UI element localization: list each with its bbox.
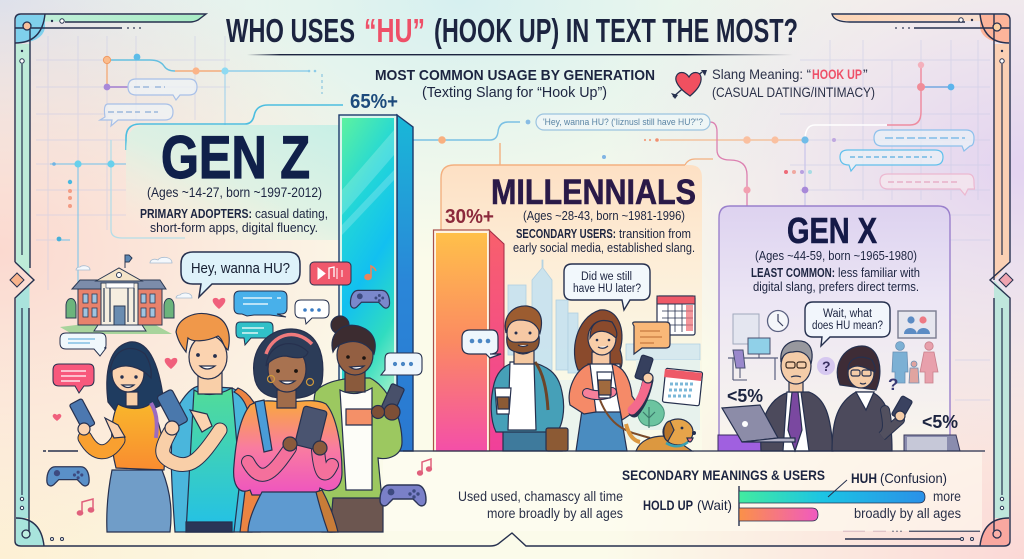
gen x description: less familiar with <box>838 266 920 280</box>
gen z description <box>140 185 328 235</box>
speech bubble: wait what: does HU mean? <box>812 320 883 332</box>
illustration: school building <box>60 255 192 334</box>
icon: music note pink right <box>418 459 431 475</box>
bar: gen z 65 percent <box>339 115 413 451</box>
speech bubble: did we still: have HU later? <box>573 283 641 295</box>
heading: gen z: GEN Z <box>161 124 310 191</box>
icon: question mark bubble: ? <box>822 358 831 374</box>
icon: wall calendar <box>657 296 695 335</box>
millennials description <box>513 209 695 255</box>
chat bubbles: decorative upper left <box>100 79 197 126</box>
gen x description: (Ages ~44-59, born ~1965-1980) <box>755 249 917 263</box>
panel: secondary meanings <box>383 451 985 531</box>
label: hold up: (Wait) <box>697 497 732 513</box>
illustration: girl with headband <box>234 329 342 532</box>
gen z description: short-form apps, digital fluency. <box>150 220 318 235</box>
quote pill <box>536 114 710 130</box>
illustration: boy with orange hair <box>156 314 262 532</box>
millennials description: SECONDARY USERS: <box>516 227 616 241</box>
speech bubble: wait what <box>805 302 890 346</box>
panel: gen z <box>126 124 339 240</box>
label: under 5 percent right: <5% <box>922 412 958 432</box>
illustration: dog <box>600 400 696 451</box>
icon: white chat left <box>60 333 106 356</box>
gen z description: (Ages ~14-27, born ~1997-2012) <box>147 185 322 200</box>
title: (HOOK UP) IN TEXT THE MOST? <box>434 12 798 49</box>
label: huh: (Confusion) <box>880 470 947 486</box>
icon: teal chat <box>236 322 273 345</box>
subtitle: (Texting Slang for “Hook Up”) <box>422 85 607 101</box>
panel: gen x <box>719 206 950 451</box>
illustration: person with bun and green cardigan <box>314 316 405 532</box>
millennials description: early social media, established slang. <box>513 241 695 255</box>
background grid <box>36 36 990 400</box>
gen x description <box>751 249 920 294</box>
icon: family silhouettes <box>892 342 938 383</box>
title <box>226 12 798 49</box>
illustration: man with coffee <box>491 306 568 451</box>
title: WHO USES <box>226 12 355 49</box>
icon: heart with arrow <box>671 70 707 99</box>
subtitle: MOST COMMON USAGE BY GENERATION <box>375 67 655 84</box>
slang meaning: (CASUAL DATING/INTIMACY) <box>712 84 875 100</box>
millennials description: (Ages ~28-43, born ~1981-1996) <box>523 209 685 223</box>
subtitle <box>375 67 655 101</box>
small bar: gen x right <box>904 435 960 451</box>
icon: media player <box>310 262 351 285</box>
left note: more broadly by all ages <box>487 506 623 521</box>
speech bubble: wait what: Wait, what <box>823 308 873 320</box>
label: hold up: HOLD UP <box>643 497 693 513</box>
label: huh: HUH <box>851 470 877 486</box>
heading: gen x: GEN X <box>787 210 877 251</box>
network lines: upper left <box>50 54 954 300</box>
icon: blue chat <box>234 291 287 317</box>
right note: broadly by all ages <box>854 506 961 521</box>
speech bubble: hey wanna hu: Hey, wanna HU? <box>191 261 290 277</box>
icon: hearts <box>53 298 225 421</box>
gen z description: casual dating, <box>255 206 328 221</box>
panel: millennials <box>441 165 702 451</box>
illustration: woman with coffee and phone <box>569 310 653 451</box>
icon: clock <box>768 310 788 332</box>
icon: dots bubble millennials <box>462 330 501 358</box>
illustration: office desk <box>728 314 778 380</box>
icon: laptop <box>722 405 795 442</box>
label: 65%: 65%+ <box>350 91 398 113</box>
gen x description: digital slang, prefers direct terms. <box>753 280 919 294</box>
speech bubble: hey wanna hu <box>181 252 300 297</box>
icon: pink chat left <box>53 364 94 393</box>
icon: dots chat <box>295 300 329 324</box>
icon: game pad purple right <box>380 485 426 506</box>
illustration: girl with long hair <box>69 342 171 532</box>
left note <box>458 489 623 521</box>
illustration: man with laptop <box>761 341 833 451</box>
small bar: gen x left <box>718 435 768 451</box>
illustration: city skyline <box>505 260 700 440</box>
icon: dots bubble gen z <box>381 353 422 375</box>
gen x description: LEAST COMMON: <box>751 266 835 280</box>
heading: secondary meanings: SECONDARY MEANINGS & USERS <box>622 467 825 483</box>
slang meaning: Slang Meaning: “ <box>712 66 811 82</box>
chat bubbles: decorative upper right <box>840 130 975 195</box>
icon: orange chat bubble <box>633 322 670 354</box>
title: “HU” <box>364 12 425 49</box>
icon: music note pink left <box>77 499 94 515</box>
icon: music note orange <box>365 266 376 279</box>
label: huh <box>851 470 947 486</box>
icon: purple question mark: ? <box>888 375 898 394</box>
speech bubble: did we still: Did we still <box>581 271 632 283</box>
slang meaning <box>712 66 875 100</box>
illustration: woman with glasses <box>832 346 913 451</box>
speech bubble: did we still <box>564 264 650 310</box>
gen z description: PRIMARY ADOPTERS: <box>140 206 252 221</box>
right note: more <box>933 489 961 504</box>
icon: small calendar <box>662 368 703 406</box>
quote pill: 'Hey, wanna HU? ('Iiznusl still have HU?"? <box>543 117 703 128</box>
label: under 5 percent left: <5% <box>727 386 763 406</box>
bar: millennials 30 percent <box>434 230 504 451</box>
icon: game pad blue left <box>47 467 89 486</box>
label: 30%: 30%+ <box>445 206 494 228</box>
icon: picture frame <box>898 311 936 338</box>
bar chart: secondary meanings <box>739 480 925 526</box>
millennials description: transition from <box>619 227 691 241</box>
left note: Used used, chamascy all time <box>458 489 623 504</box>
icon: tree <box>638 400 664 428</box>
slang meaning: ” <box>863 66 868 82</box>
icon: game pad purple top <box>350 290 390 308</box>
heading: millennials: MILLENNIALS <box>491 173 696 212</box>
slang meaning: HOOK UP <box>812 66 862 82</box>
icon: question mark bubble <box>817 357 835 375</box>
right note <box>854 489 961 521</box>
